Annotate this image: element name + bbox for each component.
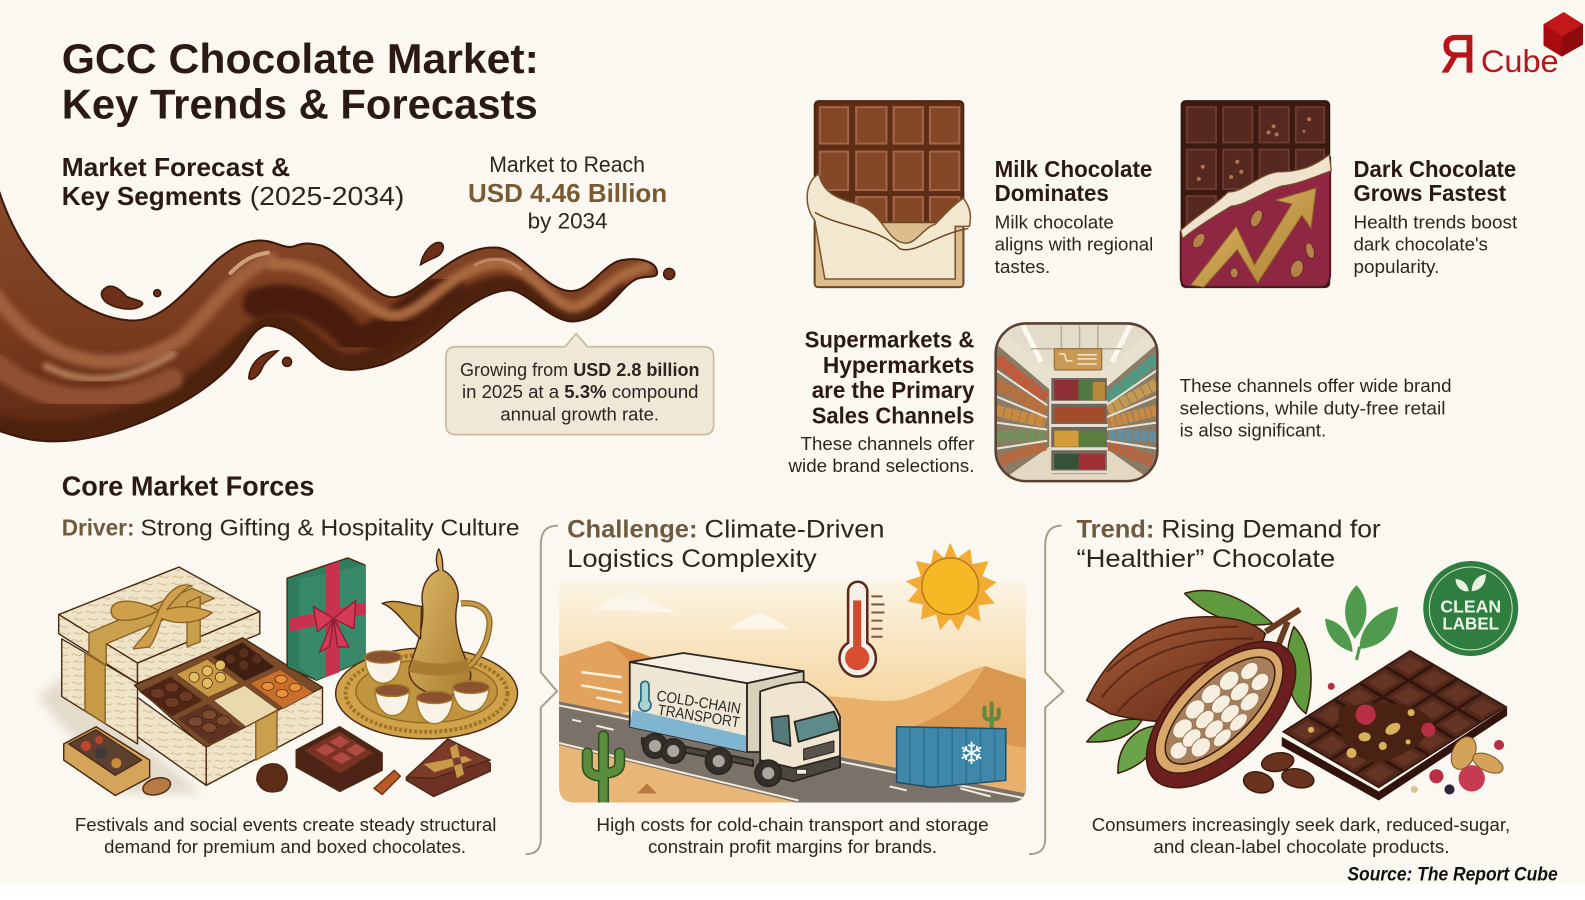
badge: clean label bbox=[1423, 561, 1518, 656]
text: dark chocolate bbox=[1353, 156, 1517, 277]
thermometer bbox=[840, 582, 884, 677]
text: channels note: These channels offer wide brand bbox=[1180, 376, 1452, 396]
market forecast value: Market to Reach bbox=[489, 152, 645, 177]
challenge heading: Logistics Complexity bbox=[567, 545, 817, 573]
source note: Source: The Report Cube bbox=[1347, 864, 1558, 885]
text: dark chocolate: dark chocolate's bbox=[1353, 235, 1488, 255]
text: supermarkets: Supermarkets & bbox=[805, 327, 975, 353]
illustration: dark chocolate with berries bbox=[1282, 650, 1507, 801]
bracket: challenge to trend bbox=[1029, 526, 1063, 854]
text: supermarkets bbox=[787, 327, 975, 476]
panel: trend bbox=[1077, 516, 1518, 857]
text: supermarkets: Hypermarkets bbox=[823, 352, 974, 378]
chocolate swirl bbox=[0, 188, 675, 441]
trend caption: Consumers increasingly seek dark, reduced-sugar, bbox=[1092, 814, 1510, 835]
logo bbox=[1440, 12, 1583, 84]
heading: core market forces: Core Market Forces bbox=[62, 470, 314, 501]
illustration: cocoa pod bbox=[1087, 591, 1321, 813]
text: milk chocolate: Milk Chocolate bbox=[995, 156, 1152, 182]
container bbox=[897, 727, 1006, 787]
text: milk chocolate: Milk chocolate bbox=[995, 212, 1114, 232]
challenge heading: Challenge: bbox=[567, 516, 697, 544]
trend heading: “Healthier” Chocolate bbox=[1077, 545, 1335, 573]
illustration: cold-chain truck in desert bbox=[559, 543, 1026, 809]
heading: market forecast: Market Forecast & bbox=[62, 152, 290, 182]
text: supermarkets: wide brand selections. bbox=[787, 456, 974, 476]
trend caption: and clean-label chocolate products. bbox=[1153, 836, 1450, 857]
trend caption bbox=[1092, 814, 1510, 857]
text: channels note: selections, while duty-free retail bbox=[1180, 398, 1445, 418]
driver heading: Strong Gifting & Hospitality Culture bbox=[141, 515, 520, 541]
challenge caption bbox=[596, 814, 989, 857]
driver caption: Festivals and social events create steady structural bbox=[75, 814, 496, 835]
text: milk chocolate bbox=[995, 156, 1153, 277]
sun bbox=[906, 543, 997, 631]
callout: growth: in 2025 at a 5.3% compound bbox=[462, 382, 698, 402]
text: dark chocolate: popularity. bbox=[1353, 257, 1439, 277]
icon: supermarket aisle bbox=[996, 323, 1157, 481]
challenge heading: Climate-Driven bbox=[705, 516, 884, 544]
heading: market forecast: (2025-2034) bbox=[250, 181, 404, 211]
market forecast value bbox=[468, 152, 667, 233]
market forecast value: USD 4.46 Billion bbox=[468, 178, 667, 208]
icon: milk chocolate bar bbox=[807, 101, 970, 287]
text: supermarkets: are the Primary bbox=[812, 377, 975, 403]
panel: driver bbox=[38, 515, 520, 857]
truck bbox=[630, 653, 840, 786]
badge: clean label: CLEAN bbox=[1440, 597, 1501, 617]
text: milk chocolate: tastes. bbox=[995, 257, 1050, 277]
callout: growth bbox=[446, 334, 714, 435]
truck label bbox=[655, 688, 742, 732]
text: dark chocolate: Dark Chocolate bbox=[1353, 156, 1516, 182]
text: channels note: is also significant. bbox=[1180, 421, 1326, 441]
icon: green sprout bbox=[1325, 585, 1398, 660]
text: milk chocolate: aligns with regional bbox=[995, 235, 1153, 255]
trend heading bbox=[1077, 516, 1381, 573]
illustration: gift boxes bbox=[38, 549, 518, 798]
market forecast value: by 2034 bbox=[528, 208, 608, 233]
trend heading: Rising Demand for bbox=[1161, 516, 1381, 544]
text: dark chocolate: Grows Fastest bbox=[1353, 180, 1506, 206]
truck label: COLD-CHAIN bbox=[655, 688, 742, 718]
title: GCC Chocolate Market: bbox=[62, 35, 539, 82]
logo: Я bbox=[1440, 25, 1476, 84]
droplets bbox=[101, 242, 675, 379]
callout: growth: annual growth rate. bbox=[500, 404, 659, 424]
text: channels note bbox=[1180, 376, 1452, 441]
bracket: driver to challenge bbox=[526, 526, 558, 854]
logo: Cube bbox=[1481, 44, 1559, 79]
text: dark chocolate: Health trends boost bbox=[1353, 212, 1517, 232]
truck label: TRANSPORT bbox=[656, 702, 741, 732]
title: Key Trends & Forecasts bbox=[62, 80, 538, 127]
container: ❄ bbox=[959, 738, 984, 771]
heading: market forecast: Key Segments bbox=[62, 181, 242, 211]
driver caption: demand for premium and boxed chocolates. bbox=[104, 836, 466, 857]
panel: challenge bbox=[559, 516, 1026, 857]
badge: clean label: LABEL bbox=[1442, 614, 1499, 634]
text: milk chocolate: Dominates bbox=[995, 180, 1109, 206]
challenge heading bbox=[567, 516, 884, 573]
text: supermarkets: Sales Channels bbox=[812, 403, 974, 429]
text: supermarkets: These channels offer bbox=[801, 434, 974, 454]
challenge caption: constrain profit margins for brands. bbox=[648, 836, 937, 857]
challenge caption: High costs for cold-chain transport and storage bbox=[596, 814, 989, 835]
callout: growth: Growing from USD 2.8 billion bbox=[460, 360, 700, 380]
trend heading: Trend: bbox=[1077, 516, 1154, 544]
icon: dark chocolate bar bbox=[1181, 101, 1331, 287]
heading: market forecast bbox=[62, 152, 404, 211]
driver heading: Driver: bbox=[62, 515, 134, 541]
driver caption bbox=[75, 814, 496, 857]
title bbox=[62, 35, 539, 127]
